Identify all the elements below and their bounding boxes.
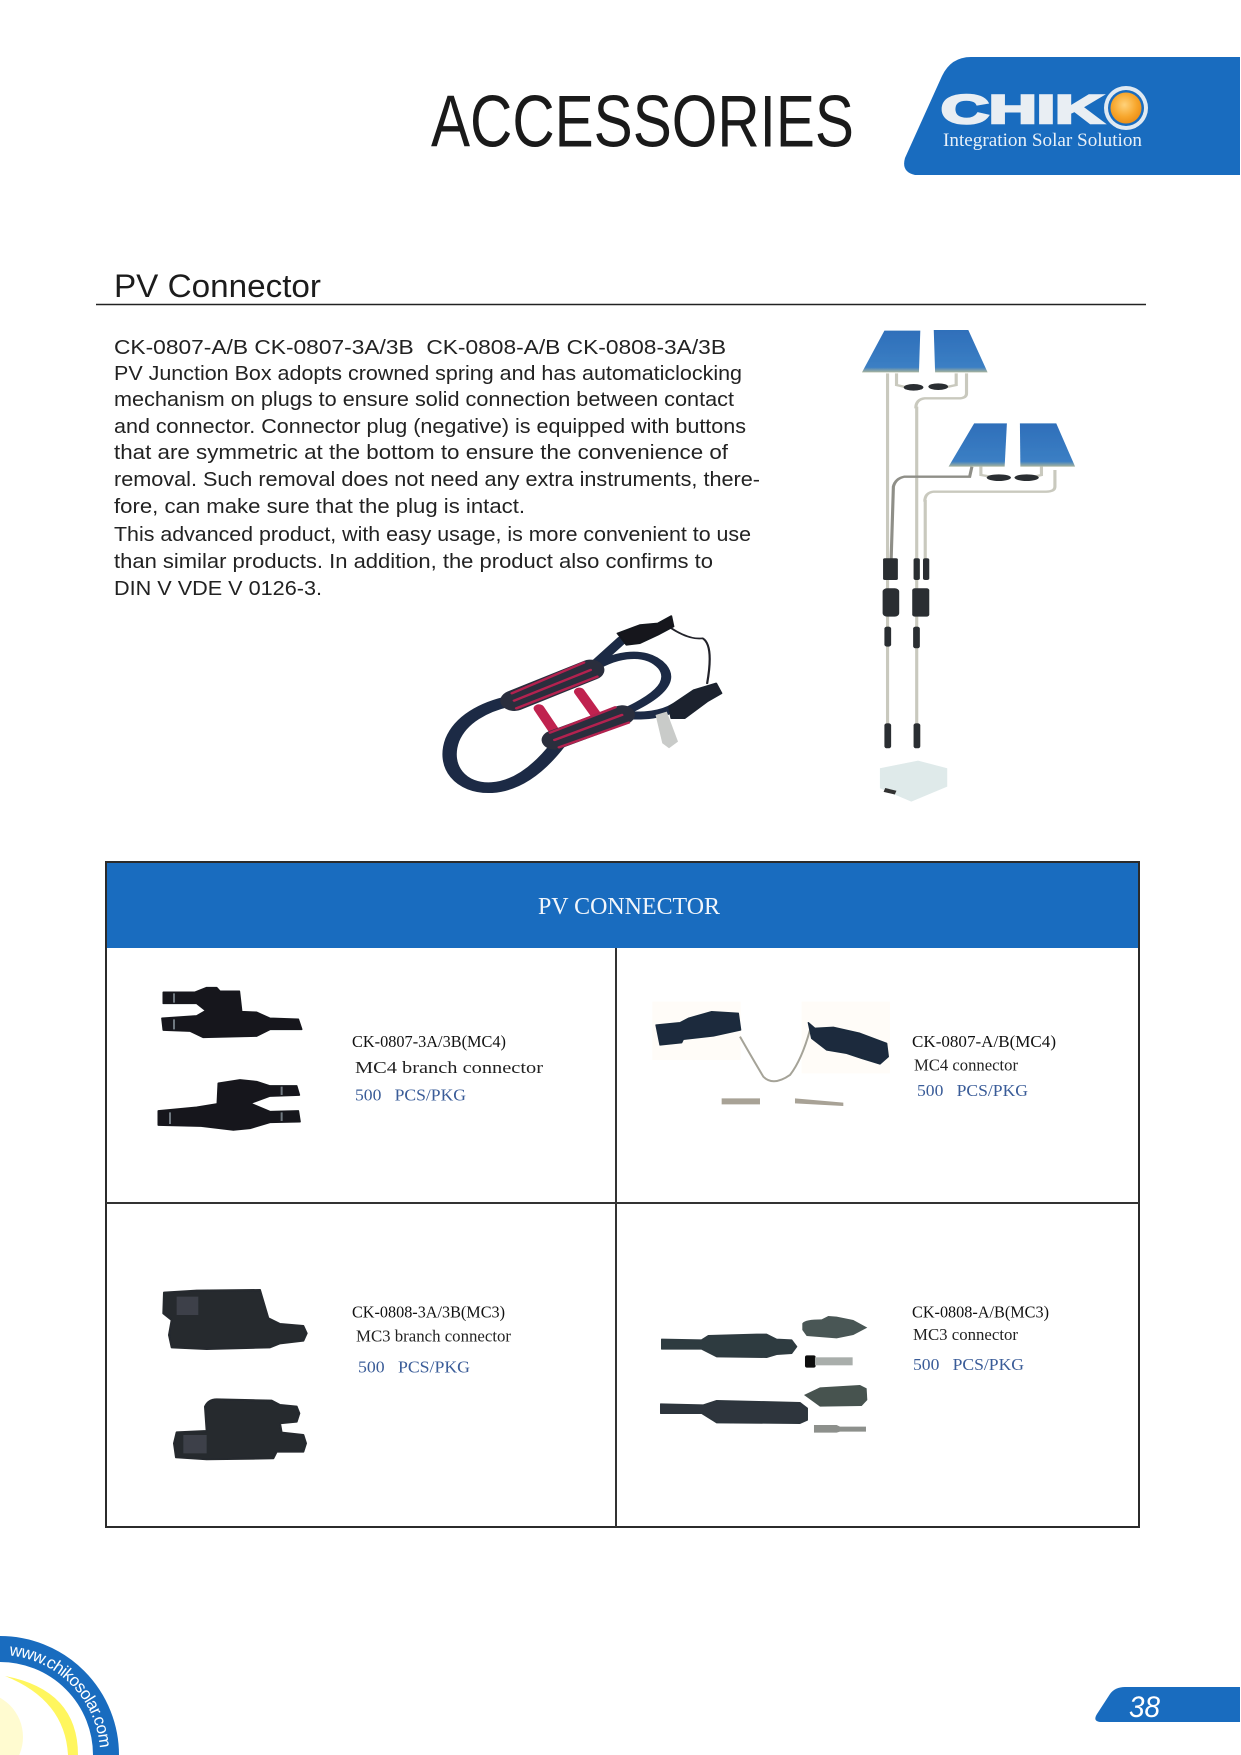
photo: MC4 branch connectors <box>158 988 302 1130</box>
photo: MC3 branch connectors <box>163 1290 307 1459</box>
description text block: that are symmetric at the bottom to ensure the convenience of <box>114 441 728 464</box>
cell: MC4 branch connector: MC4 branch connector <box>355 1058 543 1077</box>
cell: MC3 connector: CK-0808-A/B(MC3) <box>912 1302 1049 1322</box>
description text block: fore, can make sure that the plug is intact. <box>114 495 525 518</box>
description text block: DIN V VDE V 0126-3. <box>114 577 322 600</box>
description text block: mechanism on plugs to ensure solid connection between contact <box>114 388 734 411</box>
photo: looped cable with connectors <box>450 616 722 788</box>
cell: MC3 connector: MC3 connector <box>913 1325 1018 1344</box>
table: PV CONNECTOR: PV CONNECTOR <box>538 894 720 920</box>
cell: MC4 connector <box>652 1002 1056 1106</box>
description text block: and connector. Connector plug (negative) is equipped with buttons <box>114 415 746 438</box>
cell: MC4 connector: MC4 connector <box>914 1056 1018 1074</box>
cell: MC3 branch connector: CK-0808-3A/3B(MC3) <box>352 1302 505 1322</box>
page number tab: 38 <box>1129 1691 1160 1724</box>
description text block: removal. Such removal does not need any extra instruments, there- <box>114 468 760 491</box>
description text block: This advanced product, with easy usage, is more convenient to use <box>114 523 751 546</box>
photo: MC3 connector parts <box>661 1316 867 1433</box>
wiring <box>888 373 1055 723</box>
description text block: than similar products. In addition, the product also confirms to <box>114 550 713 573</box>
table: PV CONNECTOR <box>106 862 1139 1527</box>
description text block <box>114 336 760 600</box>
junction box <box>880 761 947 802</box>
diagram: solar panels wired to junction box <box>862 330 1075 802</box>
cell: MC3 branch connector: MC3 branch connector <box>356 1326 511 1346</box>
cell: MC4 branch connector <box>158 988 543 1130</box>
description text block: CK-0807-A/B CK-0807-3A/3B CK-0808-A/B CK-0808-3A/3B <box>114 336 726 359</box>
section heading: PV Connector: PV Connector <box>114 268 321 304</box>
logo: CHIKO badge: Integration Solar Solution <box>943 130 1142 151</box>
cell: MC4 connector: 500 PCS/PKG <box>917 1081 1028 1100</box>
cell: MC4 branch connector: 500 PCS/PKG <box>355 1086 466 1104</box>
cell: MC4 branch connector: CK-0807-3A/3B(MC4) <box>352 1032 506 1051</box>
cell: MC3 branch connector: 500 PCS/PKG <box>358 1358 470 1376</box>
footer corner: website arc badge: www.chikosolar.com <box>10 1646 109 1748</box>
description text block: PV Junction Box adopts crowned spring and has automaticlocking <box>114 362 742 385</box>
logo: CHIKO badge: CHIK <box>941 88 1103 132</box>
photo: MC4 connector pair <box>652 1002 890 1106</box>
cell: MC4 connector: CK-0807-A/B(MC4) <box>912 1032 1056 1051</box>
logo: CHIKO badge <box>904 57 1240 175</box>
page number tab <box>1095 1687 1240 1724</box>
table header <box>106 862 1139 948</box>
title: ACCESSORIES <box>431 82 854 162</box>
cell: MC3 branch connector <box>163 1290 511 1459</box>
cell: MC3 connector: 500 PCS/PKG <box>913 1355 1024 1374</box>
cell: MC3 connector <box>661 1302 1049 1433</box>
